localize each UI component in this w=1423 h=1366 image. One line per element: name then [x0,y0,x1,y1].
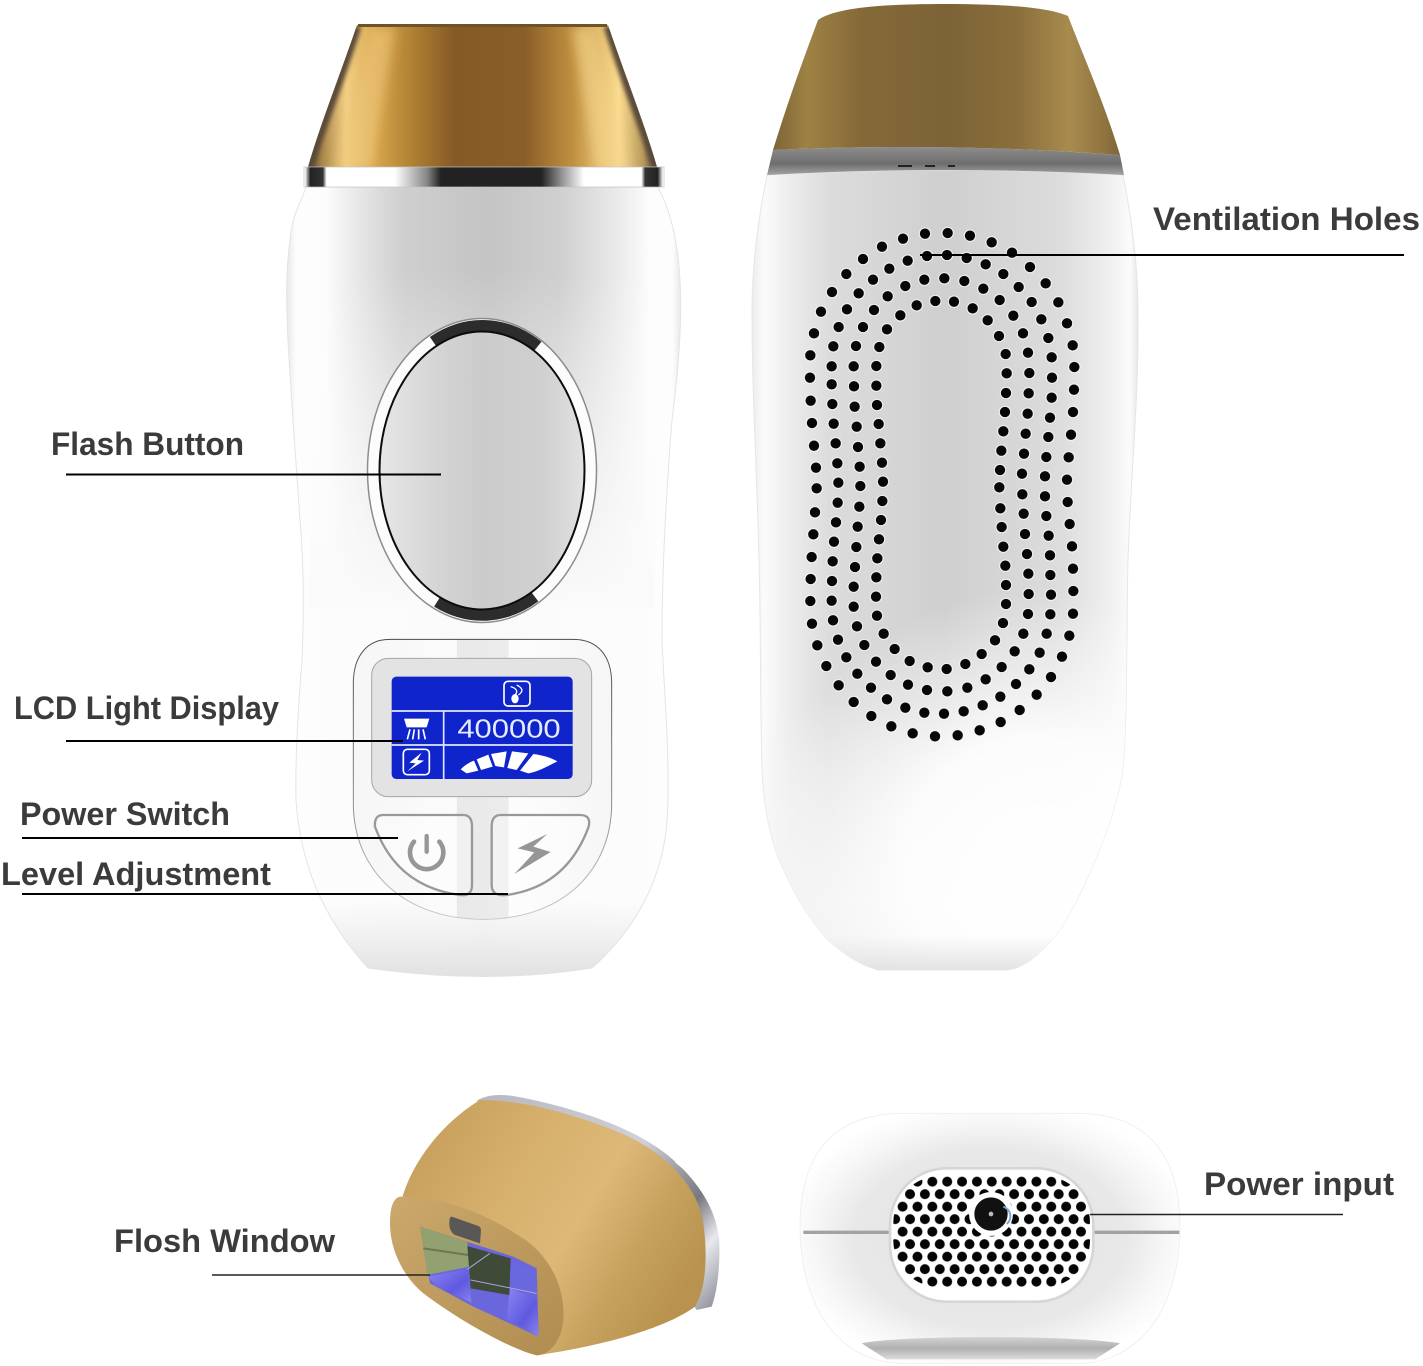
gold cap [773,4,1120,155]
front body [285,187,685,980]
bottom grey strip [862,1337,1120,1359]
device: gold head with flash window [390,1095,719,1355]
label: Flash Button: Flash Button [51,426,244,462]
hair icon [504,681,530,706]
label: Ventilation Holes: Ventilation Holes [1153,201,1420,237]
speaker grille [890,1168,1093,1302]
flash window [420,1227,539,1337]
sensor [449,1217,481,1243]
label: Level Adjustment: Level Adjustment [1,856,271,892]
chrome rim [477,1095,719,1310]
bolt icon [403,749,429,775]
level button [492,815,589,895]
flash lamp icon [404,719,429,739]
back body [750,170,1140,975]
lcd screen [392,677,573,779]
counter: 400000 [457,713,561,743]
label: Power Switch: Power Switch [20,796,230,832]
flash button [368,318,596,622]
gold shell [400,1100,706,1355]
rim notches [658,1144,687,1171]
device: bottom view with power input [800,1113,1180,1363]
level bars [461,751,557,773]
front face [390,1197,563,1355]
band [767,147,1124,175]
white housing [800,1113,1180,1363]
seam line [803,1227,1179,1237]
label: Power input: Power input [1204,1166,1394,1202]
power socket [969,1192,1013,1236]
ventilation holes [804,227,1080,742]
label: Flosh Window: Flosh Window [114,1223,335,1259]
device: front view [285,24,685,980]
power button [375,815,472,895]
control panel [353,639,612,919]
device: back view [750,4,1140,975]
chrome ring [304,167,664,187]
lcd bezel [372,658,592,797]
label: LCD Light Display: LCD Light Display [14,690,279,726]
gold cap [308,24,657,168]
panel outline [353,639,612,919]
